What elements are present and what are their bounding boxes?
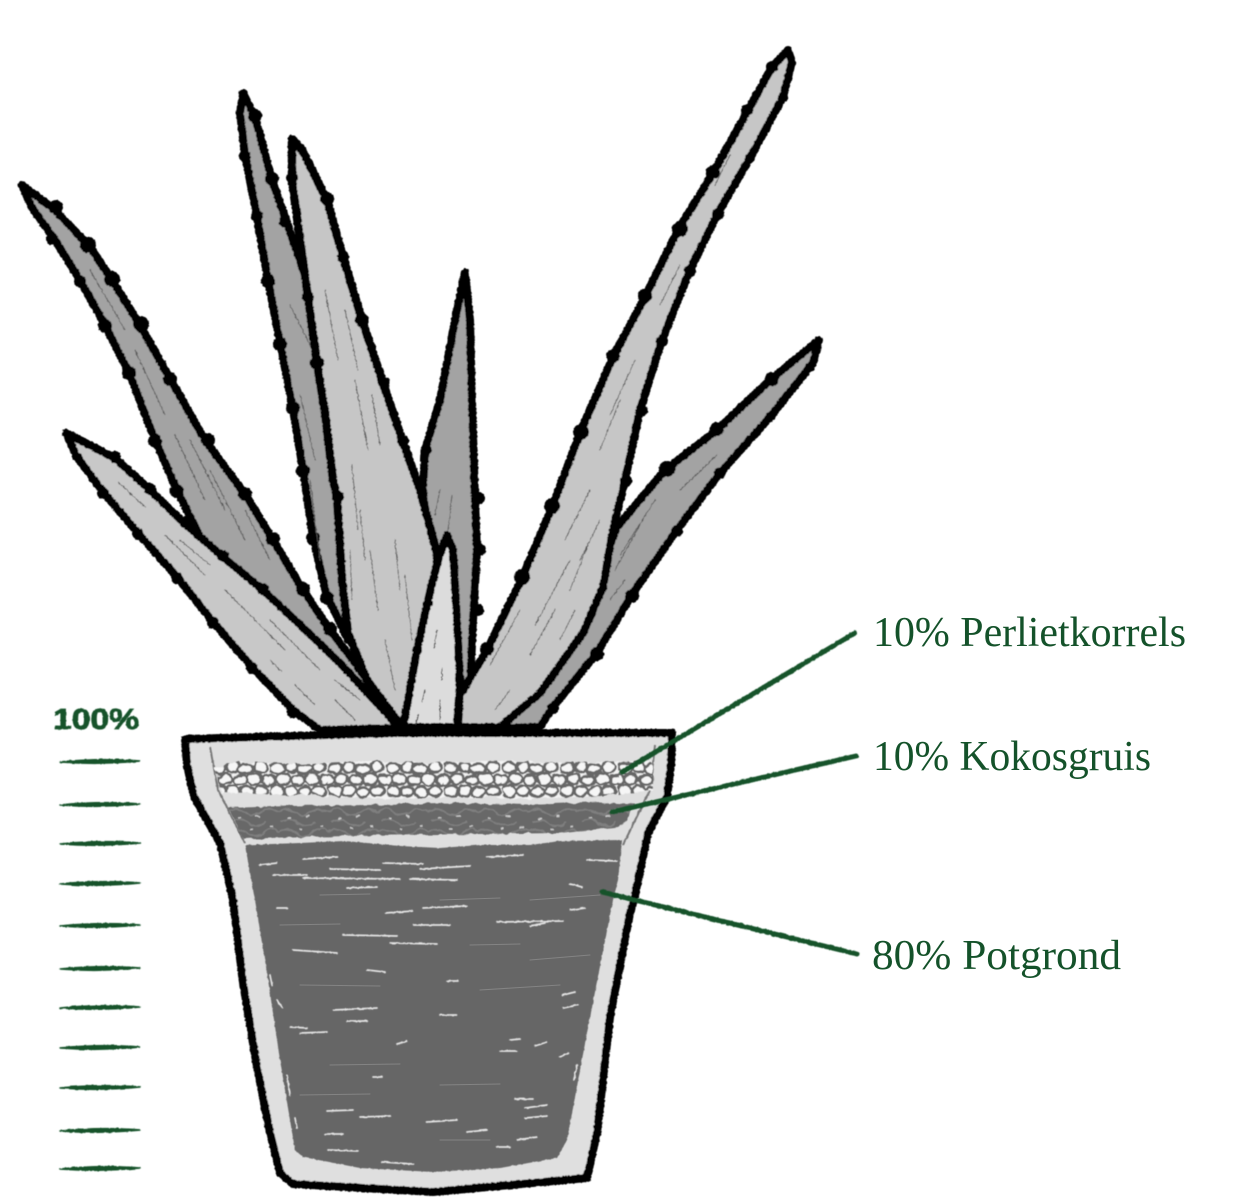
leaf: center small front xyxy=(403,535,465,727)
leader line: potting soil xyxy=(602,892,857,954)
label: coconut coir: 10% Kokosgruis xyxy=(873,734,1151,780)
leaf: center left large xyxy=(286,139,440,727)
label: potting soil: 80% Potgrond xyxy=(872,933,1121,979)
layer: potting soil xyxy=(245,840,622,1172)
pot inner guide lines xyxy=(210,745,655,845)
leaf: right lower dark xyxy=(500,340,819,728)
scale: 100% marker: 100% xyxy=(53,704,139,736)
leader line: perlite xyxy=(622,633,855,772)
leaf: right tall xyxy=(458,50,792,727)
pot body xyxy=(185,733,672,1192)
leader line: coconut coir xyxy=(612,756,856,812)
layer: perlite xyxy=(214,761,654,799)
leaf: center back dark xyxy=(422,272,486,725)
leaf: left lower front xyxy=(66,433,400,730)
layer: coconut coir xyxy=(228,802,634,839)
pot xyxy=(185,733,672,1192)
leaf: back tall left xyxy=(239,93,348,640)
leaf: far left xyxy=(22,185,400,726)
label: perlite: 10% Perlietkorrels xyxy=(873,610,1186,656)
scale: tick marks xyxy=(60,760,140,1170)
plant xyxy=(22,50,819,730)
